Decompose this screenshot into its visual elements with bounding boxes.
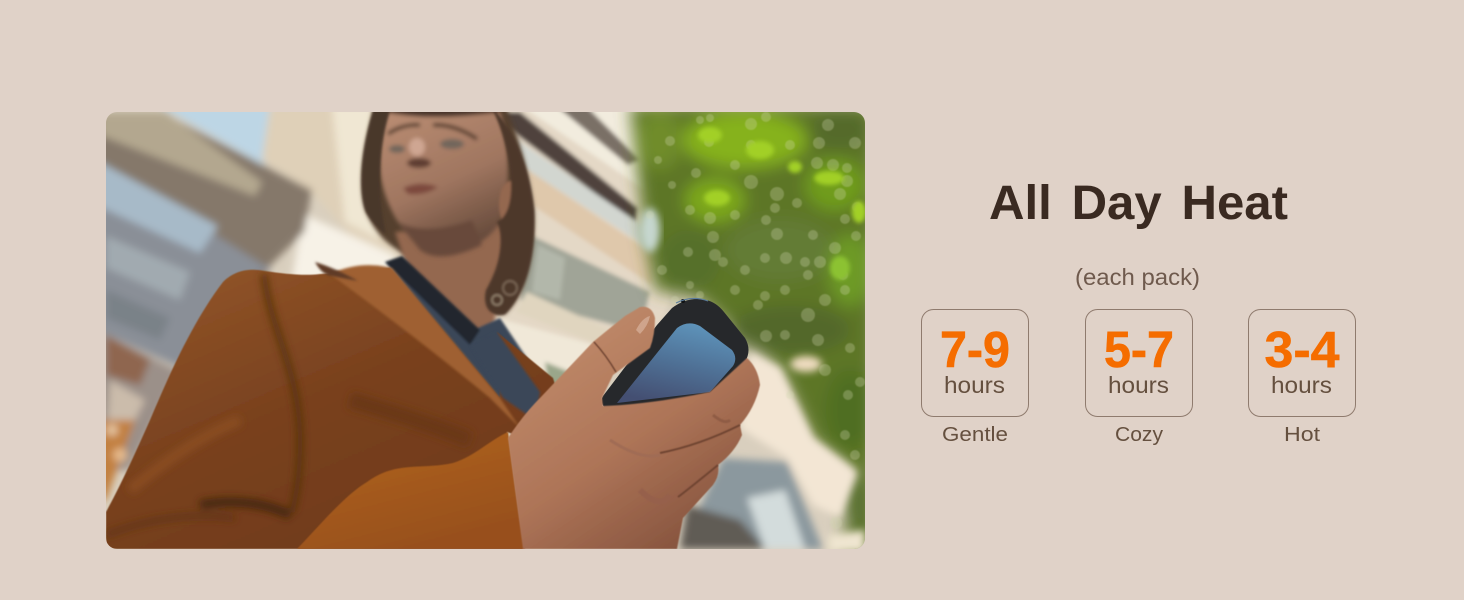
shirt — [384, 254, 529, 398]
stat: hot 3-4 hours: Hot — [1284, 424, 1321, 446]
neck — [394, 224, 502, 330]
blurred wall lower right — [680, 352, 865, 552]
blurred buildings left — [96, 100, 400, 500]
man's face — [379, 105, 508, 256]
device: hand warmer — [602, 298, 748, 410]
hand — [508, 307, 760, 549]
shirt panel beside lapel — [496, 332, 541, 414]
bright leaf patches — [698, 127, 866, 280]
ear and hair at right — [361, 105, 534, 315]
blurred building right — [496, 112, 667, 383]
lower sleeve — [297, 432, 525, 549]
man's hair behind face — [362, 105, 534, 314]
blurred foliage — [630, 105, 875, 555]
bluish fringe at tree edge — [640, 208, 660, 252]
title: All Day Heat — [989, 177, 1288, 230]
coat sleeve seams and folds — [106, 274, 470, 535]
hand detail: thumb and finger creases — [594, 342, 740, 501]
brows, eyes, nose, mouth — [388, 125, 420, 134]
coat body — [106, 268, 560, 549]
bokeh highlights — [646, 112, 865, 529]
stat: cozy 5-7 hours: Cozy — [1115, 424, 1163, 446]
stat: gentle 7-9 hours: Gentle — [942, 424, 1008, 446]
photo: man holding hand warmer — [96, 100, 875, 555]
stat: gentle 7-9 hours — [922, 310, 1028, 446]
stat: hot 3-4 hours: 3-4 — [1264, 321, 1340, 378]
stat: cozy 5-7 hours: hours — [1108, 372, 1169, 398]
subtitle: (each pack) — [1075, 264, 1200, 290]
collar — [330, 265, 520, 428]
stat: gentle 7-9 hours: hours — [944, 372, 1005, 398]
stat: hot 3-4 hours: hours — [1271, 372, 1332, 398]
stat: gentle 7-9 hours: 7-9 — [940, 321, 1010, 378]
stat: hot 3-4 hours — [1248, 310, 1356, 446]
stat: cozy 5-7 hours — [1086, 310, 1192, 446]
stat: cozy 5-7 hours: 5-7 — [1104, 321, 1174, 378]
